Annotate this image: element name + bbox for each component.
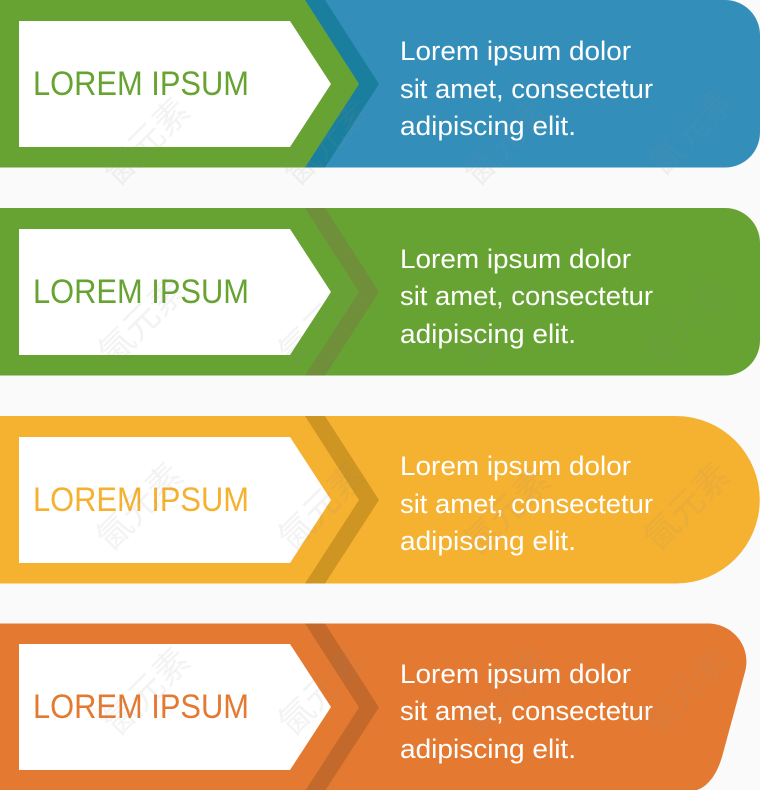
banner 2: green [0, 208, 760, 376]
banner 2 heading: LOREM IPSUM [33, 273, 249, 311]
banner 4 dark chevron [305, 624, 379, 790]
banner 1 dark chevron [305, 0, 379, 168]
banner 1 text: Lorem ipsum dolor [400, 36, 631, 66]
watermarks: 氤元素 [450, 635, 560, 745]
banner 2 text: Lorem ipsum dolor [400, 244, 631, 274]
banner 2 text: adipiscing elit. [400, 319, 576, 349]
banner 1 body [300, 0, 760, 168]
banner 1 heading: LOREM IPSUM [33, 65, 249, 103]
banner 3 text: sit amet, consectetur [400, 489, 653, 519]
watermarks: 氤元素 [450, 85, 560, 195]
watermarks: 氤元素 [450, 455, 560, 565]
watermarks: 氤元素 [83, 450, 193, 560]
banner 3 text: Lorem ipsum dolor [400, 451, 631, 481]
watermarks: 氤元素 [450, 265, 560, 375]
watermarks: 氤元素 [635, 75, 745, 185]
watermarks [83, 75, 745, 745]
watermarks: 氤元素 [630, 635, 740, 745]
banner 3 dark chevron [305, 416, 379, 584]
banner 1 white arrow [19, 21, 331, 147]
banner 4: orange [0, 624, 746, 790]
watermarks: 氤元素 [90, 635, 200, 745]
watermarks: 氤元素 [630, 265, 740, 375]
banner 1 label plate [0, 0, 359, 168]
banner 3 heading: LOREM IPSUM [33, 481, 249, 519]
banner 2 body [0, 208, 760, 376]
banner 3 body [0, 416, 760, 584]
banner 4 text: Lorem ipsum dolor [400, 659, 631, 689]
banner 2 white arrow [19, 229, 331, 355]
banner 4 white arrow [19, 644, 331, 770]
watermarks: 氤元素 [265, 635, 375, 745]
banner 1: blue [0, 0, 760, 168]
banner 4 text: sit amet, consectetur [400, 696, 653, 726]
banner 3 text: adipiscing elit. [400, 526, 576, 556]
watermarks: 氤元素 [265, 450, 375, 560]
watermarks: 氤元素 [90, 85, 200, 195]
banner 1 text: sit amet, consectetur [400, 74, 653, 104]
banner 4 heading: LOREM IPSUM [33, 688, 249, 726]
banner 4 text: adipiscing elit. [400, 734, 576, 764]
banner 1 text: adipiscing elit. [400, 111, 576, 141]
watermarks: 氤元素 [265, 265, 375, 375]
banner 4 body [0, 624, 746, 790]
watermarks: 氤元素 [630, 450, 740, 560]
banner 2 dark chevron [305, 208, 379, 376]
banner 3: yellow [0, 416, 760, 584]
banner 3 white arrow [19, 437, 331, 563]
banner 2 text: sit amet, consectetur [400, 281, 653, 311]
watermarks: 氤元素 [270, 85, 380, 195]
watermarks: 氤元素 [85, 265, 195, 375]
